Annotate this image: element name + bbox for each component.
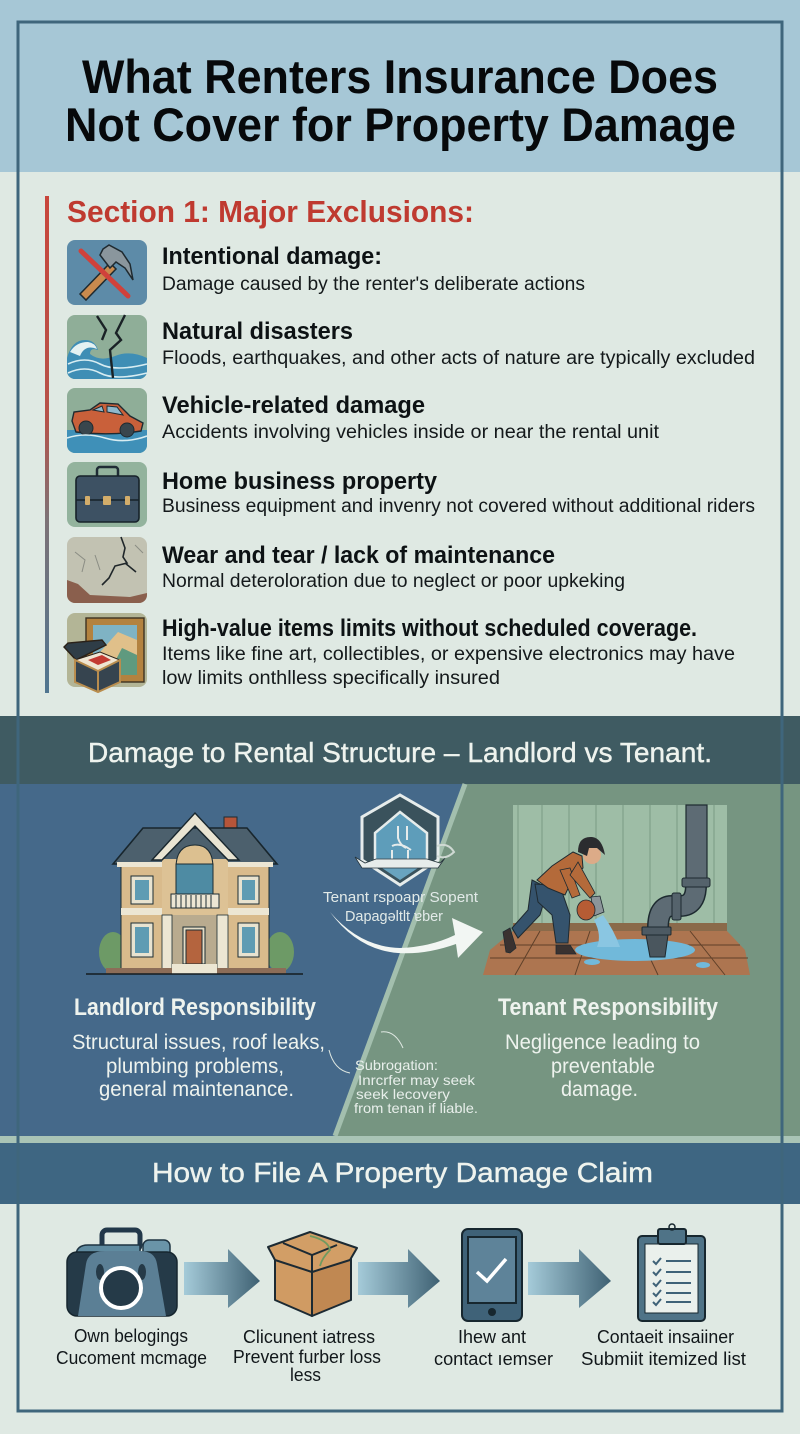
item: vehicle-related damage: Accidents involving vehicles inside or near the rental unit [162, 422, 660, 443]
item: high-value items: low limits onthlless specifically insured [162, 668, 500, 689]
step 2 label: less [290, 1365, 321, 1385]
step 2 label: Prevent furber loss [233, 1347, 381, 1367]
item: home business property [67, 462, 755, 527]
panel: tenant responsibility [335, 784, 800, 1136]
item: home business property: Home business property [162, 468, 438, 495]
item: wear and tear [67, 537, 625, 603]
step 2: box [268, 1232, 357, 1316]
section banner: filing a claim [0, 1136, 800, 1204]
step 1 label: Own belogings [74, 1326, 188, 1346]
tenant description: Negligence leading to [505, 1031, 700, 1054]
item: intentional damage: Intentional damage: [162, 243, 382, 270]
item: high-value items: High-value items limits without scheduled coverage. [162, 615, 697, 642]
step 4 label: Contaeit insaiiner [597, 1327, 734, 1347]
step 3 label: Ihew ant [458, 1327, 526, 1347]
item: natural disasters [67, 315, 755, 379]
section heading: Section 1: Major Exclusions: [67, 194, 474, 229]
step 1 label: Cucoment mcmage [56, 1348, 207, 1368]
icon: house [86, 813, 303, 974]
step 2 label: Clicunent iatress [243, 1327, 375, 1347]
item: intentional damage: Damage caused by the renter's deliberate actions [162, 274, 585, 295]
icon: cracked wall [67, 537, 147, 603]
tenant description: preventable [551, 1055, 655, 1078]
tenant description: damage. [561, 1078, 638, 1101]
icon: hexagon house badge [355, 795, 454, 885]
icon: framed art and treasure chest [64, 613, 147, 692]
arrow 2 [358, 1249, 440, 1308]
item: vehicle-related damage: Vehicle-related damage [162, 392, 425, 419]
step 2 label [233, 1327, 381, 1385]
step 4: clipboard checklist [638, 1224, 705, 1321]
icon: briefcase [67, 462, 147, 527]
tenant description [505, 1031, 700, 1101]
step 1 label [56, 1326, 207, 1368]
step 4 label: Submiit itemized list [581, 1349, 746, 1369]
title banner: What Renters Insurance Does [82, 50, 718, 103]
title banner: Not Cover for Property Damage [65, 98, 736, 151]
arrow 3 [528, 1249, 611, 1308]
item: home business property: Business equipment and invenry not covered without additional riders [162, 496, 755, 517]
tenant heading: Tenant Responsibility [498, 994, 719, 1021]
item: natural disasters: Natural disasters [162, 318, 353, 345]
icon: wave and earthquake crack [67, 315, 147, 379]
panel: claim steps [56, 1224, 746, 1385]
section banner: landlord vs tenant [0, 716, 800, 784]
callout: tenant responsibility note [323, 889, 479, 925]
arrow 1 [184, 1249, 260, 1308]
step 4 label [581, 1327, 746, 1369]
arrow: landlord to tenant [330, 912, 483, 958]
icon: car in water [67, 388, 147, 453]
step 3 label [434, 1327, 553, 1369]
step 3: phone [462, 1229, 522, 1321]
item: wear and tear: Wear and tear / lack of maintenance [162, 542, 555, 569]
item: intentional damage [67, 240, 585, 305]
landlord heading: Landlord Responsibility [74, 994, 317, 1021]
callout: subrogation [329, 1032, 478, 1116]
callout: tenant responsibility note: Dapagəltlt ɐber [345, 908, 443, 925]
item: natural disasters: Floods, earthquakes, and other acts of nature are typically excluded [162, 348, 755, 369]
item: vehicle-related damage [67, 388, 660, 453]
section banner: landlord vs tenant: Damage to Rental Structure – Landlord vs Tenant. [88, 737, 712, 768]
landlord description: general maintenance. [99, 1078, 294, 1101]
step 1: camera [67, 1230, 177, 1316]
landlord description: plumbing problems, [106, 1055, 284, 1078]
section banner: filing a claim: How to File A Property Damage Claim [152, 1157, 653, 1188]
landlord description [72, 1031, 325, 1101]
callout: tenant responsibility note: Tenant rspoapr Sopent [323, 889, 479, 906]
item: wear and tear: Normal deteroloration due to neglect or poor upkeking [162, 571, 625, 592]
item: high-value items [64, 613, 735, 692]
callout: subrogation: seek lecovery [356, 1086, 450, 1102]
callout: subrogation: from tenan if liable. [354, 1100, 478, 1116]
illustration: tenant with leaking pipe [483, 805, 750, 975]
step 3 label: contact ıemser [434, 1349, 553, 1369]
panel: major exclusions [45, 194, 755, 693]
landlord description: Structural issues, roof leaks, [72, 1031, 325, 1054]
callout: subrogation: Subrogation: [355, 1057, 438, 1073]
icon: crossed-out hammer [67, 240, 147, 305]
title banner [0, 0, 800, 172]
item: high-value items: Items like fine art, collectibles, or expensive electronics may have [162, 644, 735, 665]
panel: landlord responsibility [0, 784, 465, 1136]
callout: subrogation: Inrcrfer may seek [358, 1072, 476, 1088]
